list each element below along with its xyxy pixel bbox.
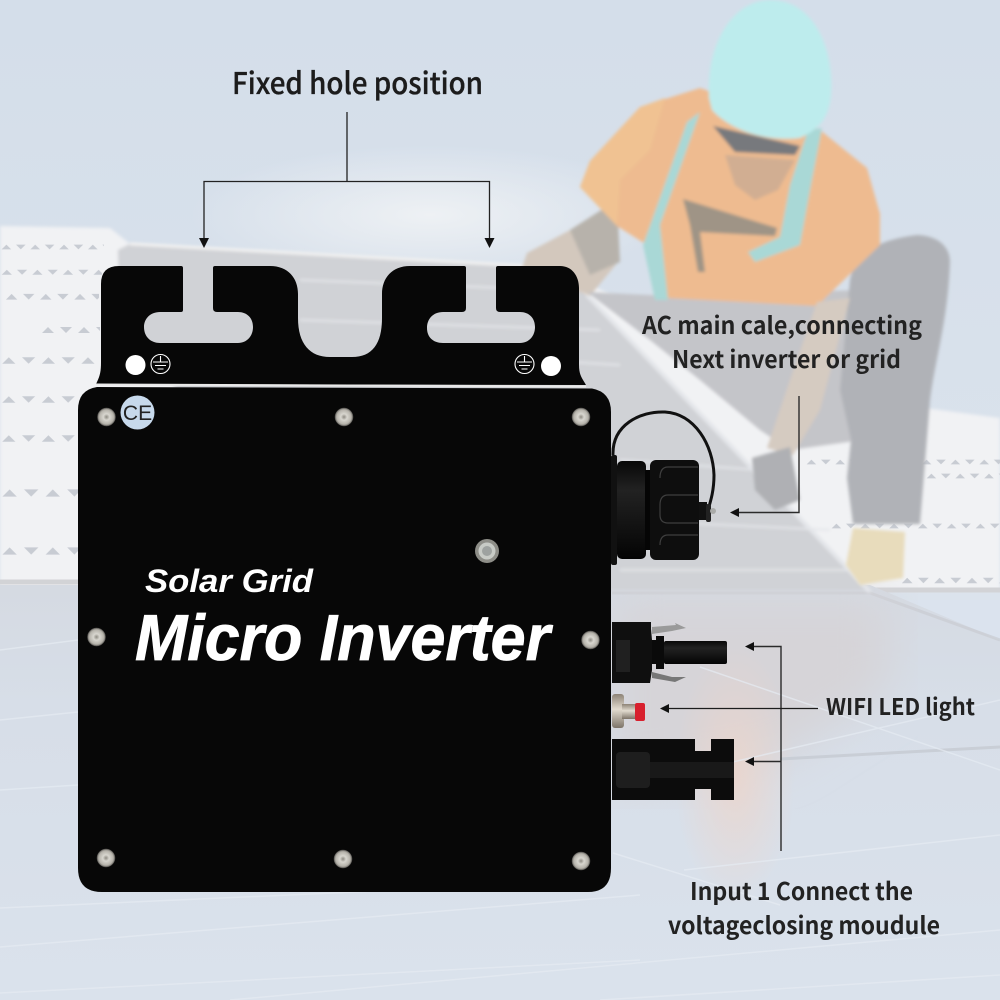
background: clouds <box>190 145 670 285</box>
arrow: AC connector <box>730 396 799 517</box>
background: worker <box>522 0 950 585</box>
indicator vent <box>475 539 499 563</box>
icon: ground symbol left <box>151 354 170 374</box>
worker shirt <box>580 88 880 306</box>
cap strap <box>613 412 714 510</box>
bracket mounting holes and ground marks <box>126 354 561 376</box>
arrows: input connectors <box>745 642 781 851</box>
label: AC main cable: Next inverter or grid <box>672 340 901 375</box>
connector: upper MC4 <box>612 622 727 683</box>
worker boot <box>846 528 905 585</box>
icon: CE mark <box>120 396 154 430</box>
background: tilted solar panel on roof <box>118 244 870 592</box>
label: AC main cable <box>641 306 922 375</box>
icon: CE mark: CE <box>123 402 152 425</box>
product name: Micro Inverter: Micro Inverter <box>135 601 554 674</box>
label: fixed hole position: Fixed hole position <box>232 59 483 103</box>
background: solar panels lower area <box>0 585 1000 1000</box>
connector: lower MC4 <box>612 739 734 800</box>
worker arm left <box>522 226 618 296</box>
label: input connector: voltageclosing moudule <box>668 906 940 941</box>
worker sunglasses <box>713 126 800 155</box>
worker lower body shade <box>587 290 862 450</box>
worker glove <box>752 447 800 510</box>
screws <box>88 408 600 870</box>
label: input connector <box>668 872 940 941</box>
worker face and neck <box>725 155 795 200</box>
label: AC main cable: AC main cale,connecting <box>641 306 922 341</box>
label: input connector: Input 1 Connect the <box>690 872 913 907</box>
connector: WIFI LED <box>612 694 645 728</box>
worker belt strap <box>683 199 777 272</box>
product name: Solar Grid: Solar Grid <box>145 563 315 599</box>
inverter body <box>78 387 611 892</box>
icon: ground symbol right <box>515 354 534 374</box>
arrow: WIFI LED <box>660 704 818 713</box>
worker trousers <box>840 235 950 524</box>
AC connector <box>611 412 716 565</box>
label: WIFI LED light: WIFI LED light <box>826 688 975 722</box>
separator line <box>96 384 586 386</box>
background: white roof with tiles <box>0 226 1000 590</box>
arrow: fixed hole bracket <box>199 112 494 248</box>
background: sky <box>0 0 1000 600</box>
worker helmet <box>709 0 831 139</box>
worker harness <box>643 112 700 300</box>
worker forearm <box>767 298 850 455</box>
mounting bracket <box>96 266 586 385</box>
